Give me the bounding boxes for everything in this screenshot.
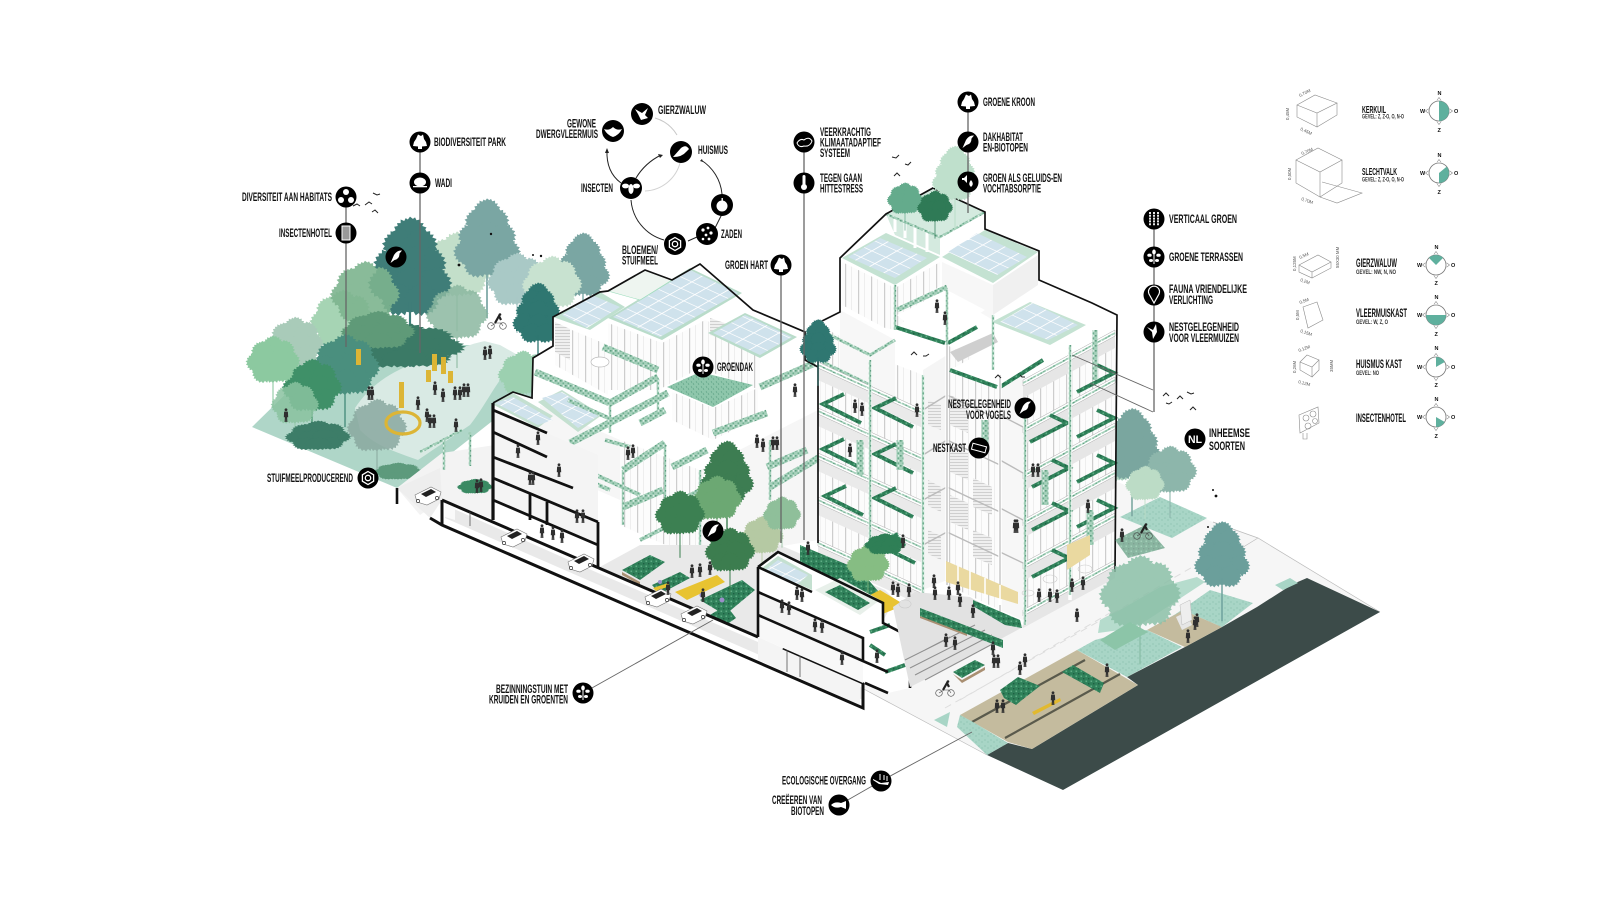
legend: huismus kast: GEVEL: NO	[1356, 370, 1379, 377]
legend: vleermuiskast: O	[1451, 313, 1456, 319]
legend: slechtvalk: N	[1438, 153, 1442, 159]
callout: groen als geluids en vochtabsorptie: GROEN ALS GELUIDS-EN	[983, 171, 1062, 185]
callout lines	[346, 102, 1154, 805]
legend: slechtvalk: O	[1454, 171, 1459, 177]
panel: ground plane	[860, 480, 1380, 755]
callout: gewone dwergvleermuis: GEWONE	[567, 116, 596, 130]
callout: gewone dwergvleermuis: DWERGVLEERMUIS	[536, 127, 598, 141]
callout: nestgelegenheid voor vleermuizen: NESTGELEGENHEID	[1169, 320, 1239, 334]
callout: fauna vriendelijke verlichting: FAUNA VRIENDELIJKE	[1169, 282, 1247, 296]
callout: dakhabitat en biotopen: DAKHABITAT	[983, 130, 1023, 144]
legend: kerkuil: KERKUIL	[1362, 105, 1386, 116]
callout: groene kroon	[958, 92, 1035, 112]
callout: nestgelegenheid voor vogels	[948, 397, 1036, 422]
courtyard paving and planters	[598, 545, 905, 660]
legend: kerkuil: O	[1454, 109, 1459, 115]
callout: nestgelegenheid voor vogels: VOOR VOGELS	[966, 408, 1011, 422]
legend: vleermuiskast: N	[1434, 295, 1438, 301]
callout: dakhabitat en biotopen: EN-BIOTOPEN	[983, 140, 1028, 154]
legend: huismus kast: W	[1417, 365, 1423, 371]
legend: huismus kast	[1292, 344, 1456, 389]
legend: vleermuiskast: 0,15M	[1300, 328, 1313, 337]
callout: groen als geluids en vochtabsorptie: VOCHTABSORPTIE	[983, 182, 1041, 196]
legend: gierzwaluw: O	[1451, 263, 1456, 269]
legend: vleermuiskast: 0,5M	[1295, 310, 1300, 320]
trees: behind building right	[1087, 408, 1197, 519]
legend: insectenhotel: INSECTENHOTEL	[1356, 413, 1406, 425]
callout: wadi: WADI	[435, 176, 452, 190]
callout: diversiteit aan habitats	[242, 186, 356, 208]
callout: nestkast	[933, 438, 990, 458]
callout: tegen gaan hittestress: HITTESTRESS	[820, 182, 863, 196]
legend: huismus kast: O	[1451, 365, 1456, 371]
callout: insecten	[581, 177, 642, 199]
legend: slechtvalk: SLECHTVALK	[1362, 167, 1397, 178]
trees: courtyard	[654, 440, 906, 602]
callout: fauna vriendelijke verlichting: VERLICHTING	[1169, 293, 1213, 307]
panel: water canal	[987, 578, 1380, 790]
callout: veerkrachtig klimaatadaptief systeem: SYSTEEM	[820, 146, 850, 160]
legend: gierzwaluw: GEVEL: NW, N, NO	[1356, 269, 1396, 276]
callout: verticaal groen	[1144, 208, 1237, 230]
callout: fauna vriendelijke verlichting	[1144, 282, 1247, 307]
legend: huismus kast: N	[1434, 346, 1438, 352]
legend: huismus kast: 35MM	[1329, 359, 1334, 372]
callout: inheemse soorten	[1184, 426, 1250, 453]
callout: tegen gaan hittestress	[794, 171, 863, 196]
yellow sculptures in park	[356, 349, 453, 434]
callout: veerkrachtig klimaatadaptief systeem	[794, 125, 881, 160]
callout: creeren van biotopen: BIOTOPEN	[791, 804, 824, 818]
legend: insectenhotel: W	[1417, 415, 1423, 421]
building: tower	[818, 188, 1117, 628]
legend: slechtvalk	[1287, 147, 1459, 205]
legend: insectenhotel: N	[1434, 397, 1438, 403]
legend: kerkuil: 0,45M	[1300, 126, 1313, 136]
legend: insectenhotel	[1299, 397, 1456, 440]
callout: insectenhotel: INSECTENHOTEL	[279, 226, 332, 240]
legend: slechtvalk: W	[1420, 171, 1426, 177]
legend: slechtvalk: 0,50M	[1287, 167, 1292, 180]
callout: groene terrassen: GROENE TERRASSEN	[1169, 250, 1243, 264]
legend: gierzwaluw: 55X30 MM	[1335, 246, 1340, 268]
legend: kerkuil: GEVEL: Z, Z-O, O, N-O	[1362, 114, 1404, 120]
legend: insectenhotel: O	[1451, 415, 1456, 421]
legend: kerkuil: N	[1438, 91, 1442, 97]
icon: bird in courtyard	[702, 520, 724, 542]
callout: zaden: ZADEN	[721, 227, 742, 241]
callout: gierzwaluw	[631, 103, 706, 125]
plaza stairs and planters	[893, 525, 1192, 687]
callout: huismus: HUISMUS	[698, 143, 728, 157]
callout: biodiversiteit park: BIODIVERSITEIT PARK	[434, 135, 506, 149]
legend: slechtvalk: GEVEL: Z, Z-O, O, N-O	[1362, 176, 1404, 184]
callout: bloemen stuifmeel: STUIFMEEL	[622, 254, 658, 268]
people silhouettes	[284, 299, 1199, 713]
trees: park foreground planting	[246, 311, 549, 480]
insects	[458, 233, 1217, 528]
callout: veerkrachtig klimaatadaptief systeem: VEERKRACHTIG	[820, 125, 871, 139]
callout: diversiteit aan habitats: DIVERSITEIT AAN HABITATS	[242, 190, 332, 204]
callout: nestgelegenheid voor vogels: NESTGELEGENHEID	[948, 397, 1011, 411]
callout: groene kroon: GROENE KROON	[983, 95, 1035, 109]
birds	[353, 155, 1196, 410]
building: left block with terraces	[492, 264, 820, 570]
callout: zaden	[696, 223, 742, 245]
panel: tan waterside plaza	[960, 610, 1222, 749]
legend: vleermuiskast: Z	[1434, 332, 1438, 338]
legend: kerkuil: 0,45M	[1285, 107, 1290, 120]
callout: bezinningstuin	[489, 682, 594, 706]
callout: nestgelegenheid voor vleermuizen	[1144, 320, 1239, 345]
legend: gierzwaluw: Z	[1434, 281, 1438, 287]
legend: slechtvalk: 0,70M	[1301, 196, 1314, 205]
callout: gewone dwergvleermuis	[536, 116, 624, 142]
callout: gierzwaluw: GIERZWALUW	[658, 103, 706, 117]
legend: slechtvalk: Z	[1438, 190, 1442, 196]
legend: huismus kast: HUISMUS KAST	[1356, 359, 1402, 371]
callout: ecologische overgang	[782, 770, 892, 792]
building: front section block	[758, 552, 910, 693]
legend: gierzwaluw: 0,2M	[1300, 277, 1311, 285]
callout: inheemse soorten: INHEEMSE	[1209, 426, 1250, 440]
legend: slechtvalk: 0,70M	[1301, 147, 1314, 156]
legend: vleermuiskast: VLEERMUISKAST	[1356, 308, 1407, 320]
legend: vleermuiskast: GEVEL: W, Z, O	[1356, 319, 1388, 326]
callout: nestgelegenheid voor vleermuizen: VOOR VLEERMUIZEN	[1169, 331, 1239, 345]
trees: park background	[266, 198, 610, 394]
callout: fruit	[711, 194, 733, 216]
trees: foreground streetside	[1099, 521, 1250, 664]
callout: tegen gaan hittestress: TEGEN GAAN	[820, 171, 862, 185]
callout: dakhabitat en biotopen	[958, 130, 1028, 154]
legend: gierzwaluw: W	[1417, 263, 1423, 269]
callout: bloemen stuifmeel: BLOEMEN/	[622, 243, 658, 257]
icon: bird in park	[386, 246, 406, 268]
legend: huismus kast: 0,12M	[1298, 379, 1311, 387]
small plaza and underground parking	[397, 430, 495, 520]
legend: kerkuil: W	[1420, 109, 1426, 115]
ecological cycle diagram	[536, 103, 742, 268]
callout: inheemse soorten: SOORTEN	[1209, 439, 1245, 453]
legend: vleermuiskast	[1295, 295, 1456, 338]
legend: insectenhotel: Z	[1434, 434, 1438, 440]
legend: gierzwaluw: 0,5M	[1298, 251, 1310, 260]
callout: veerkrachtig klimaatadaptief systeem: KLIMAATADAPTIEF	[820, 136, 881, 150]
callout: bloemen stuifmeel	[622, 233, 686, 268]
callout: stuifmeelproducerend	[267, 468, 378, 488]
legend: huismus kast: Z	[1434, 383, 1438, 389]
legend: gierzwaluw: 0,125M	[1292, 256, 1297, 271]
legend: huismus kast: 0,12M	[1298, 344, 1311, 353]
street section with cars	[415, 487, 863, 708]
legend: gierzwaluw: N	[1434, 245, 1438, 251]
callout: verticaal groen: VERTICAAL GROEN	[1169, 212, 1237, 226]
callout: insectenhotel	[279, 222, 356, 244]
callout: stuifmeelproducerend: STUIFMEELPRODUCEREND	[267, 471, 353, 485]
callout: ecologische overgang: ECOLOGISCHE OVERGANG	[782, 774, 866, 788]
legend: vleermuiskast: 0,5M	[1299, 297, 1310, 305]
legend: vleermuiskast: W	[1417, 313, 1423, 319]
trees: crown on tower	[799, 146, 979, 386]
callout: biodiversiteit park	[410, 132, 506, 152]
legend: kerkuil	[1285, 88, 1459, 136]
panel: park base	[252, 320, 545, 488]
callout: nestkast: NESTKAST	[933, 441, 966, 455]
cyclists	[488, 313, 1152, 696]
callout: groen hart: GROEN HART	[725, 258, 768, 272]
callout: groen als geluids en vochtabsorptie	[958, 171, 1062, 196]
legend: kerkuil: Z	[1438, 128, 1442, 134]
panel: lawns along canal	[934, 497, 1298, 755]
callout: groen hart	[725, 254, 792, 276]
callout: bezinningstuin: BEZINNINGSTUIN MET	[496, 682, 568, 696]
legend: gierzwaluw	[1292, 245, 1456, 287]
callout: inheemse soorten: NL	[1188, 434, 1202, 446]
callout: groene terrassen	[1144, 246, 1243, 268]
callout: huismus	[670, 141, 728, 163]
callout: groendak	[692, 356, 753, 378]
legend: huismus kast: 0,26M	[1292, 360, 1297, 373]
callout: groendak: GROENDAK	[717, 360, 753, 374]
callout: creeren van biotopen: CREËEREN VAN	[772, 792, 822, 807]
callout: bezinningstuin: KRUIDEN EN GROENTEN	[489, 692, 568, 706]
legend: kerkuil: 0,70M	[1298, 88, 1312, 98]
callout: wadi	[410, 172, 452, 194]
callout: insecten: INSECTEN	[581, 181, 613, 195]
legend: gierzwaluw: GIERZWALUW	[1356, 258, 1397, 270]
callout: creeren van biotopen	[772, 792, 850, 818]
